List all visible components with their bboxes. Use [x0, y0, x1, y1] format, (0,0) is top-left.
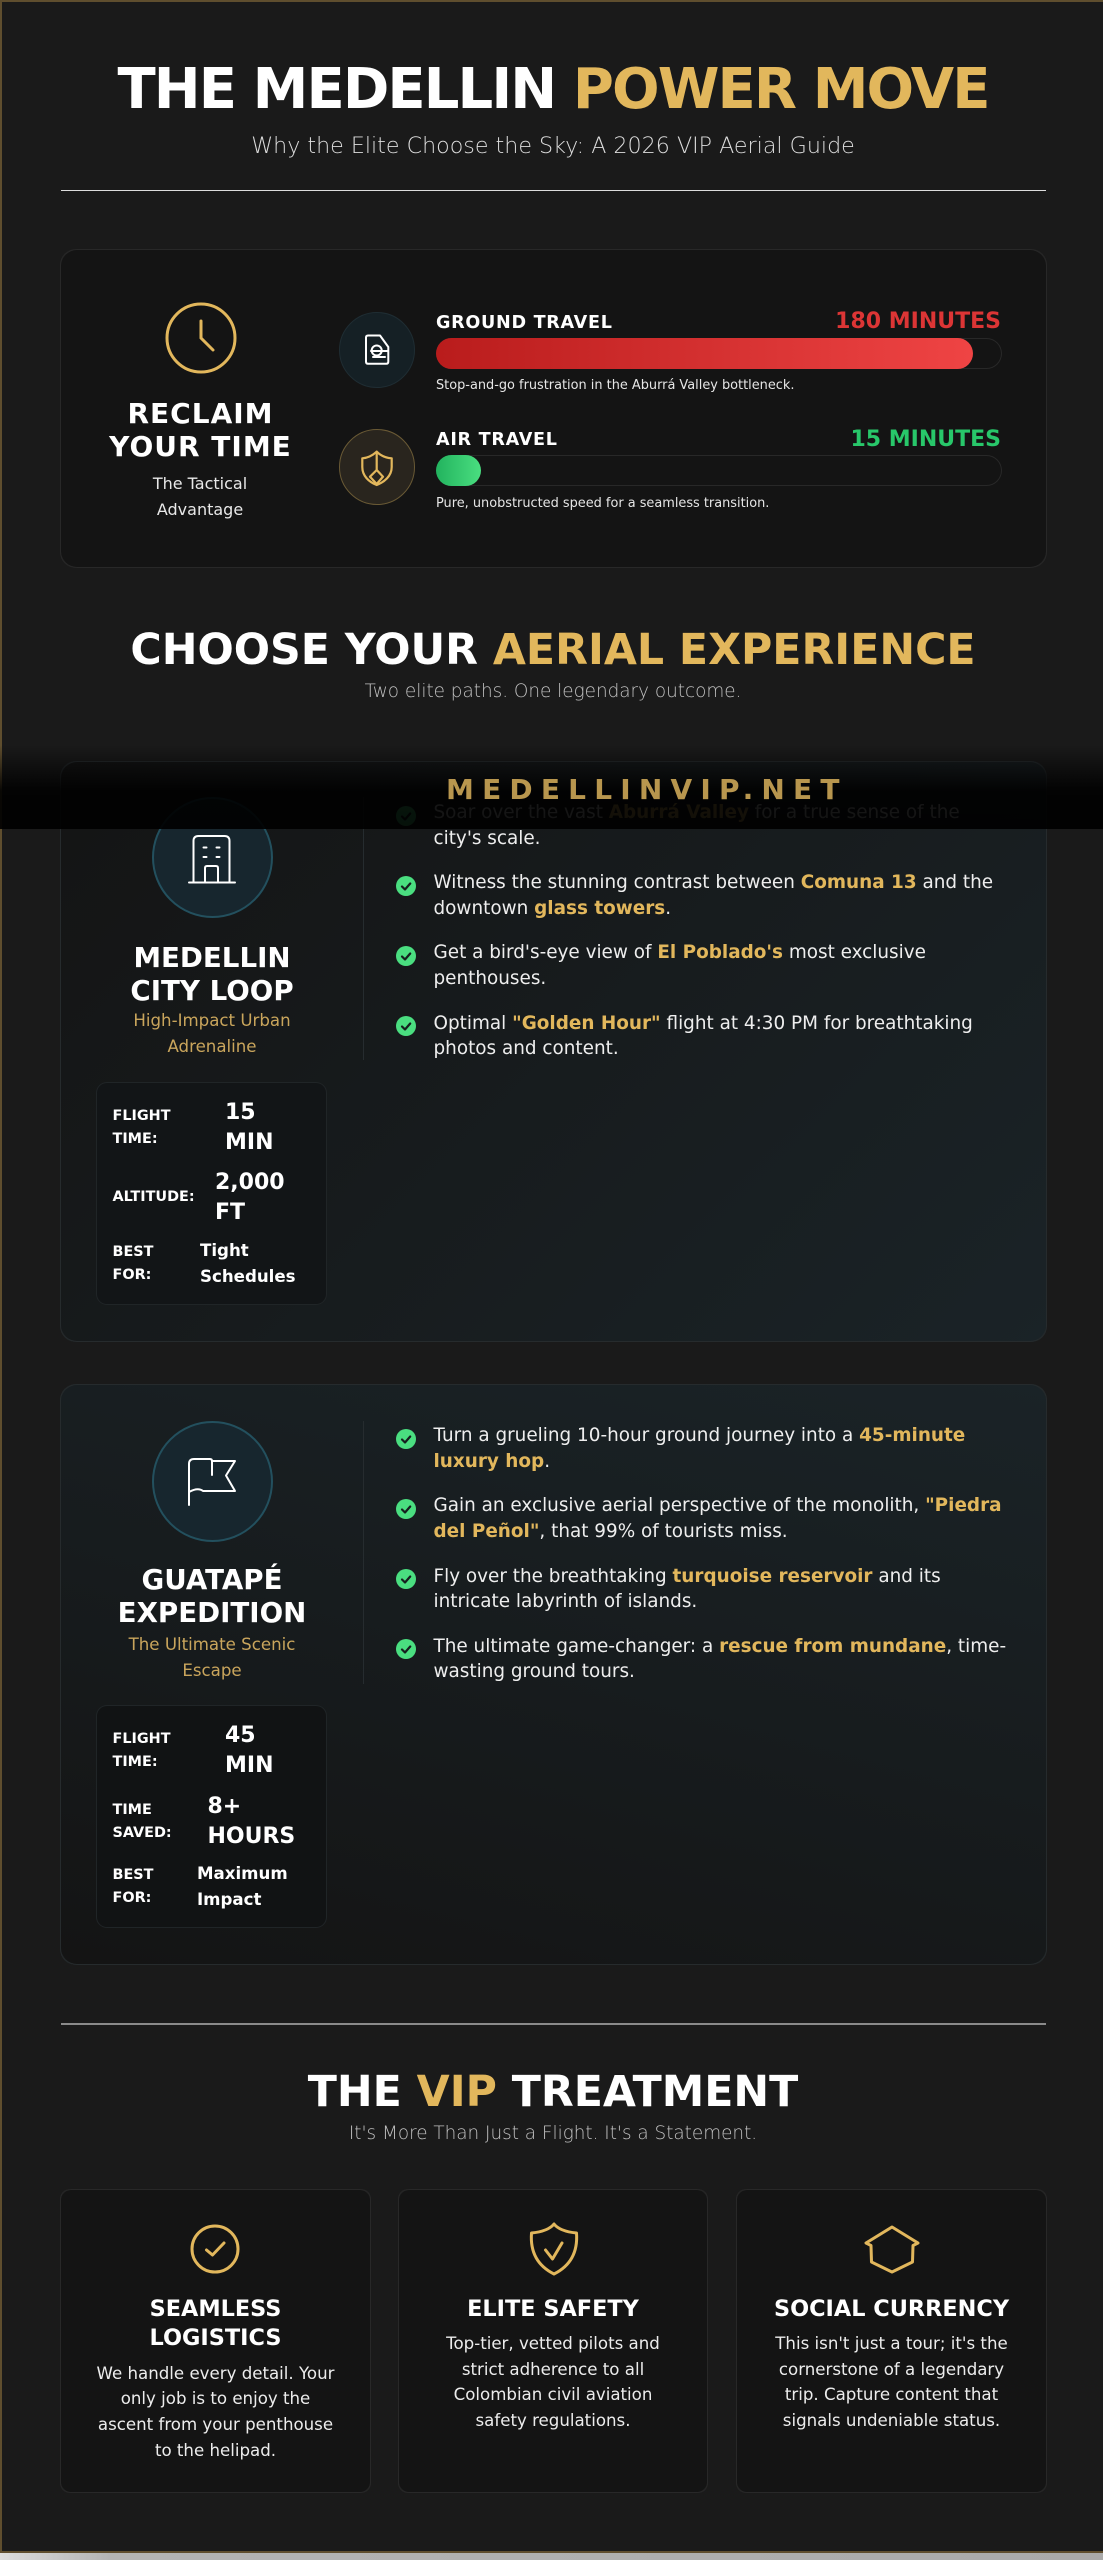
panel heading: RECLAIM — [127, 397, 274, 430]
air travel note: Pure, unobstructed speed for a seamless transition. — [436, 496, 769, 511]
bullet 2 — [396, 872, 993, 919]
stat: flight time — [112, 1722, 274, 1778]
icon: clock — [166, 302, 236, 374]
stat: flight time: 45 — [225, 1722, 256, 1748]
card text: We handle every detail. Your — [97, 2364, 334, 2382]
stat: time saved: TIME — [112, 1802, 152, 1818]
bullet 1: luxury hop. — [434, 1451, 550, 1472]
stat: altitude: 2,000 — [215, 1170, 285, 1194]
card text — [446, 2334, 660, 2430]
card text: Colombian civil aviation — [454, 2385, 652, 2404]
card text — [775, 2334, 1008, 2430]
panel: medellin city loop — [61, 761, 1046, 1342]
panel subheading: Advantage — [157, 500, 243, 519]
bullet 3 — [396, 942, 926, 989]
ground travel note: Stop-and-go frustration in the Aburrá Valley bottleneck. — [436, 378, 794, 393]
card subtitle — [128, 1635, 295, 1680]
title: THE MEDELLIN POWER MOVE — [117, 57, 989, 122]
card title: EXPEDITION — [118, 1596, 306, 1628]
card title: SOCIAL CURRENCY — [774, 2296, 1009, 2322]
card title: CITY LOOP — [130, 974, 294, 1006]
bullet 2: del Peñol", that 99% of tourists miss. — [434, 1521, 788, 1542]
stat: best for: Impact — [197, 1890, 261, 1909]
heading: choose your aerial experience: CHOOSE YOUR AERIAL EXPERIENCE — [130, 624, 976, 674]
card title: GUATAPÉ — [141, 1562, 282, 1596]
stat: time saved: SAVED: — [112, 1824, 172, 1840]
panel subheading: The Tactical — [153, 474, 247, 493]
stat: flight time: 15 — [225, 1100, 256, 1124]
card subtitle: Adrenaline — [167, 1037, 257, 1056]
card text: trip. Capture content that — [785, 2385, 998, 2404]
stats box — [97, 1083, 326, 1304]
panel heading — [108, 397, 292, 463]
bullet 4 — [396, 1012, 973, 1059]
card text: ascent from your penthouse — [98, 2415, 333, 2434]
bullet 4: Optimal "Golden Hour" flight at 4:30 PM for breathtaking — [434, 1012, 973, 1034]
card title — [150, 2296, 281, 2350]
stat: altitude: FT — [215, 1200, 245, 1224]
bullet 4 — [396, 1636, 1006, 1682]
stat: flight time: FLIGHT — [112, 1731, 171, 1747]
bullet 4: photos and content. — [434, 1038, 619, 1059]
card subtitle: High-Impact Urban — [133, 1011, 291, 1030]
air travel bar — [436, 455, 1002, 486]
card text: cornerstone of a legendary — [779, 2360, 1004, 2379]
stat: flight time — [112, 1100, 274, 1154]
card subtitle: Escape — [182, 1661, 242, 1680]
stat: altitude — [112, 1170, 285, 1224]
card subtitle: The Ultimate Scenic — [129, 1635, 295, 1654]
card text: to the helipad. — [155, 2441, 276, 2460]
bullet 4: The ultimate game-changer: a rescue from mundane, time- — [434, 1636, 1006, 1656]
stat: flight time: MIN — [225, 1130, 274, 1154]
ground travel value: 180 MINUTES — [835, 309, 1001, 334]
card text: signals undeniable status. — [783, 2411, 1000, 2430]
card title — [130, 940, 294, 1006]
card text — [97, 2364, 334, 2460]
panel heading: YOUR TIME — [109, 430, 292, 463]
stat: best for: FOR: — [112, 1890, 151, 1906]
panel: social currency — [737, 2189, 1046, 2493]
stat: best for: BEST — [112, 1867, 153, 1883]
stat: best for — [112, 1241, 296, 1286]
heading: the vip treatment: THE VIP TREATMENT — [308, 2067, 798, 2117]
icon: flag — [152, 1421, 273, 1542]
panel: seamless logistics — [61, 2189, 370, 2493]
stat: flight time: TIME: — [112, 1754, 158, 1770]
stats box — [97, 1706, 326, 1927]
icon: circle check — [190, 2224, 240, 2274]
card text: This isn't just a tour; it's the — [775, 2334, 1008, 2353]
card title: MEDELLIN — [133, 940, 291, 974]
bullet 1: Soar over the vast Aburrá Valley for a true sense of the — [434, 802, 960, 823]
stat: best for: Schedules — [200, 1267, 296, 1286]
stat: time saved — [112, 1794, 295, 1848]
card text: strict adherence to all — [462, 2360, 644, 2379]
stat: best for: Maximum — [197, 1864, 288, 1883]
card title: SEAMLESS — [150, 2296, 281, 2322]
card text: safety regulations. — [476, 2411, 630, 2430]
icon: building — [152, 797, 273, 918]
bullet 3: Fly over the breathtaking turquoise reservoir and its — [434, 1566, 941, 1586]
card title — [118, 1562, 306, 1628]
bullet 4: wasting ground tours. — [434, 1661, 635, 1682]
panel: reclaim your time — [61, 249, 1046, 568]
bullet 3: intricate labyrinth of islands. — [434, 1591, 697, 1612]
card text: only job is to enjoy the — [121, 2389, 310, 2408]
bullet 2: downtown glass towers. — [434, 898, 671, 919]
bullet 2: Gain an exclusive aerial perspective of the monolith, "Piedra — [434, 1495, 1002, 1516]
panel: guatape expedition — [61, 1384, 1046, 1965]
card title: ELITE SAFETY — [467, 2296, 639, 2322]
stat: best for — [112, 1864, 288, 1909]
subtitle: Why the Elite Choose the Sky: A 2026 VIP Aerial Guide — [251, 133, 855, 159]
watermark banner — [0, 745, 1103, 829]
bullet 1 — [396, 1425, 965, 1472]
bullet 3 — [396, 1566, 941, 1612]
icon: ground travel — [339, 312, 415, 388]
bullet 3: penthouses. — [434, 968, 546, 989]
ground travel bar — [436, 338, 1002, 368]
panel: elite safety — [399, 2189, 707, 2493]
bullet 1 — [396, 802, 960, 849]
bullet 2 — [396, 1495, 1002, 1542]
bullet 1: Turn a grueling 10-hour ground journey into a 45-minute — [434, 1425, 965, 1446]
stat: altitude: ALTITUDE: — [112, 1189, 195, 1205]
stat: flight time: FLIGHT — [112, 1108, 171, 1124]
stat: time saved: 8+ — [208, 1794, 241, 1818]
subheading: more than just a flight: It's More Than Just a Flight. It's a Statement. — [349, 2123, 757, 2144]
stat: time saved: HOURS — [208, 1824, 295, 1848]
stat: best for: BEST — [112, 1244, 153, 1260]
bullet 3: Get a bird's-eye view of El Poblado's most exclusive — [434, 942, 926, 963]
stat: best for: FOR: — [112, 1267, 151, 1283]
stat: best for: Tight — [200, 1241, 249, 1260]
stat: flight time: MIN — [225, 1752, 274, 1778]
ground travel label: GROUND TRAVEL — [436, 313, 613, 333]
icon: shield check — [530, 2222, 578, 2276]
icon: air travel — [339, 429, 415, 505]
card subtitle — [133, 1011, 291, 1056]
icon: diamond house — [864, 2226, 920, 2274]
air travel value: 15 MINUTES — [850, 427, 1001, 452]
panel subheading — [152, 474, 247, 519]
bullet 2: Witness the stunning contrast between Comuna 13 and the — [434, 872, 993, 893]
stat: flight time: TIME: — [112, 1130, 158, 1146]
card text: Top-tier, vetted pilots and — [446, 2334, 660, 2353]
watermark text: MEDELLINVIP.NET — [446, 773, 848, 806]
air travel label: AIR TRAVEL — [436, 430, 558, 450]
bullet 1: city's scale. — [434, 828, 541, 849]
card title: LOGISTICS — [150, 2324, 281, 2350]
subheading: two elite paths: Two elite paths. One legendary outcome. — [365, 681, 741, 702]
